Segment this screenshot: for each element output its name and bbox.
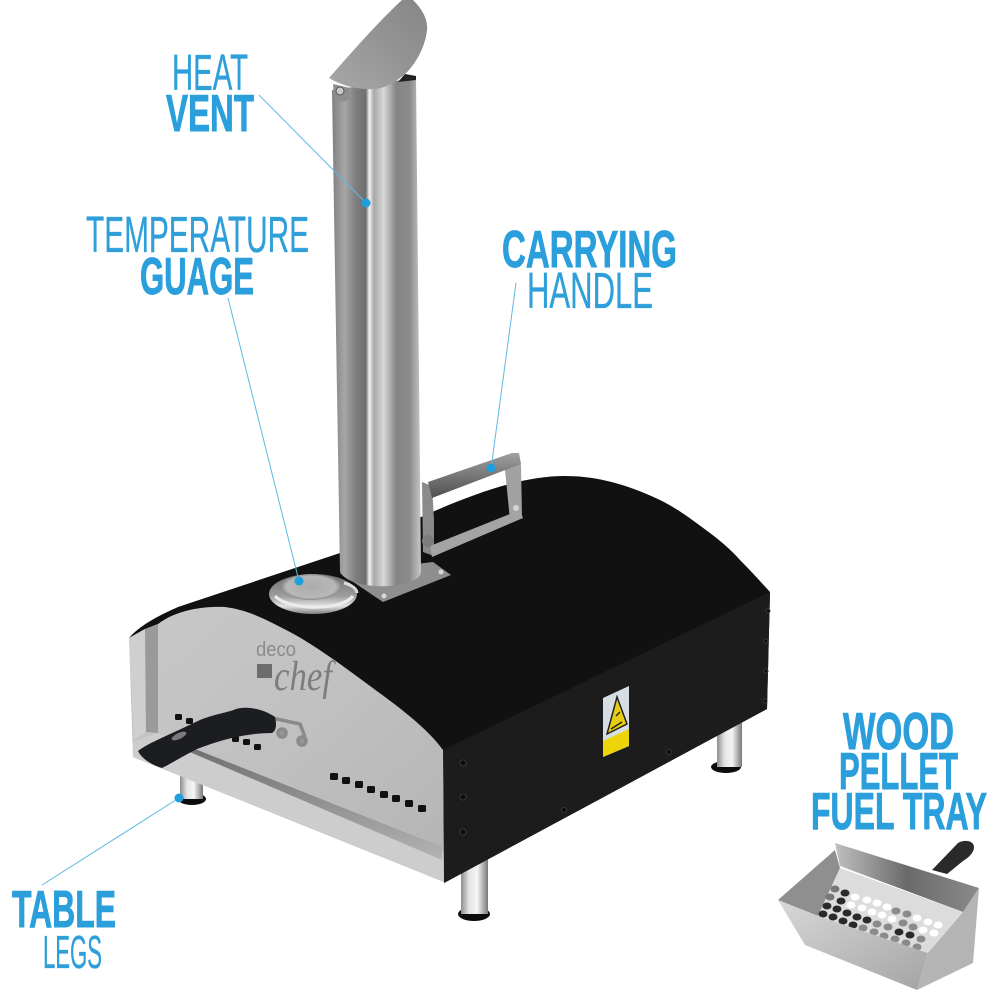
oven right side panel bbox=[443, 592, 770, 883]
tray left wall bbox=[778, 850, 840, 916]
flange screws bbox=[382, 570, 444, 598]
label: table legs bbox=[12, 794, 184, 978]
lower front shelf bbox=[133, 733, 444, 882]
left flange shade bbox=[145, 624, 158, 733]
tray handle bbox=[932, 841, 974, 874]
tray perforated floor bbox=[818, 868, 963, 953]
hinge bracket bbox=[333, 84, 350, 101]
label: carrying handle: HANDLE bbox=[527, 262, 653, 319]
tray holes bbox=[818, 886, 942, 950]
left flange strip bbox=[129, 629, 146, 740]
tray right wall bbox=[917, 888, 979, 990]
fuel tray bbox=[778, 841, 979, 990]
side screws bbox=[460, 609, 770, 835]
oven black body bbox=[129, 476, 770, 883]
label: heat vent bbox=[166, 44, 370, 208]
chimney flange bbox=[340, 562, 451, 602]
label: heat vent: HEAT bbox=[172, 44, 248, 101]
brand logo bbox=[256, 639, 336, 700]
front door handle bbox=[138, 708, 276, 768]
oven front steel panel bbox=[129, 607, 444, 882]
label: heat vent: VENT bbox=[166, 85, 254, 143]
label: table legs: LEGS bbox=[43, 926, 102, 978]
label: temperature gauge: TEMPERATURE bbox=[86, 206, 309, 263]
tray back wall bbox=[835, 843, 979, 912]
door hinge bbox=[272, 718, 306, 745]
warning sticker bbox=[603, 686, 629, 757]
front vent slots bbox=[175, 714, 426, 812]
vent cap bbox=[329, 0, 427, 89]
chimney bbox=[332, 78, 421, 586]
pizza oven bbox=[129, 0, 770, 921]
label: carrying handle: CARRYING bbox=[502, 221, 677, 279]
lower front dark groove bbox=[178, 747, 442, 860]
label: table legs: TABLE bbox=[12, 881, 116, 939]
carrying handle bbox=[422, 453, 523, 557]
brand logo: deco bbox=[256, 639, 296, 661]
chimney top opening bbox=[398, 74, 416, 82]
brand logo: chef bbox=[274, 654, 336, 700]
oven legs bbox=[178, 700, 742, 921]
tray front face bbox=[778, 900, 928, 990]
label: temperature gauge bbox=[86, 206, 309, 586]
handle hole bbox=[170, 730, 188, 742]
label: temperature gauge: GUAGE bbox=[140, 248, 254, 306]
temperature gauge bbox=[269, 574, 357, 614]
label: wood pellet fuel tray bbox=[811, 703, 987, 841]
label: carrying handle bbox=[486, 221, 677, 472]
